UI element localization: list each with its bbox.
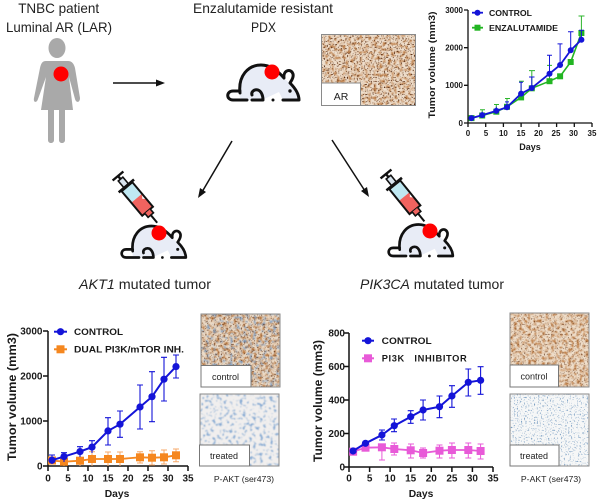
chart: dual PI3K/mTOR inhibitor tumor volume: 15 — [102, 474, 114, 484]
icon: treated mouse right — [389, 224, 453, 257]
chart: enzalutamide tumor volume: Days — [519, 142, 541, 152]
chart: enzalutamide tumor volume: 0 — [466, 129, 471, 138]
chart: dual PI3K/mTOR inhibitor tumor volume: Days — [105, 489, 130, 500]
chart: PI3K inhibitor tumor volume: Tumor volume (mm3) — [311, 340, 325, 462]
chart: dual PI3K/mTOR inhibitor tumor volume: 10 — [82, 474, 94, 484]
panel: PIK3CA control histology — [510, 313, 589, 387]
chart: enzalutamide tumor volume: 10 — [499, 129, 508, 138]
heading: patient: TNBC patient — [18, 0, 99, 16]
chart: dual PI3K/mTOR inhibitor tumor volume: DUAL PI3K/mTOR INH. — [74, 345, 184, 355]
chart: PI3K inhibitor tumor volume: 35 — [487, 474, 499, 484]
chart: PI3K inhibitor tumor volume: 15 — [405, 474, 417, 484]
panel: AKT1 treated histology — [200, 394, 279, 466]
chart: PI3K inhibitor tumor volume: 800 — [328, 328, 345, 340]
panel: AR histology: AR — [334, 91, 349, 103]
chart: enzalutamide tumor volume: 0 — [459, 119, 464, 128]
chart: PI3K inhibitor tumor volume: 600 — [328, 362, 345, 373]
chart: PI3K inhibitor tumor volume: 5 — [367, 474, 373, 484]
chart: dual PI3K/mTOR inhibitor tumor volume: 0 — [37, 462, 43, 472]
chart: enzalutamide tumor volume: 35 — [588, 129, 597, 138]
heading: patient — [6, 0, 112, 35]
chart: dual PI3K/mTOR inhibitor tumor volume: Tumor volume (mm3) — [5, 333, 19, 461]
chart: PI3K inhibitor tumor volume: 0 — [339, 462, 345, 474]
icon: patient figure with tumor — [34, 38, 80, 143]
chart: enzalutamide tumor volume — [427, 6, 597, 152]
heading: PDX — [193, 0, 333, 35]
chart: dual PI3K/mTOR inhibitor tumor volume: 2000 — [20, 372, 43, 382]
chart: enzalutamide tumor volume: CONTROL — [489, 9, 532, 18]
label: P-AKT right: P-AKT (ser473) — [521, 474, 581, 484]
chart: PI3K inhibitor tumor volume: CONTROL — [382, 336, 432, 346]
arrow: PDX to AKT1 — [198, 141, 232, 198]
chart: dual PI3K/mTOR inhibitor tumor volume: 30 — [162, 474, 174, 484]
chart: enzalutamide tumor volume: 3000 — [445, 6, 464, 15]
chart: dual PI3K/mTOR inhibitor tumor volume: 1000 — [20, 416, 43, 428]
panel: PIK3CA treated histology: treated — [520, 451, 548, 461]
heading: PDX: PDX — [251, 19, 277, 35]
panel: AKT1 treated histology: treated — [210, 451, 238, 461]
chart: enzalutamide tumor volume: 30 — [569, 129, 578, 138]
chart: dual PI3K/mTOR inhibitor tumor volume: 25 — [142, 474, 154, 484]
panel: AKT1 control histology: control — [212, 372, 239, 382]
panel: AR histology — [322, 34, 416, 106]
chart: PI3K inhibitor tumor volume: 30 — [467, 474, 478, 484]
icon: PDX mouse — [228, 64, 299, 102]
chart: dual PI3K/mTOR inhibitor tumor volume: 20 — [122, 474, 134, 484]
arrow: patient to PDX — [113, 80, 165, 86]
chart: dual PI3K/mTOR inhibitor tumor volume — [5, 326, 194, 500]
chart: PI3K inhibitor tumor volume: 25 — [446, 474, 458, 484]
chart: PI3K inhibitor tumor volume: 20 — [426, 474, 437, 484]
chart: PI3K inhibitor tumor volume: Days — [409, 489, 434, 500]
chart: PI3K inhibitor tumor volume: 0 — [346, 474, 352, 484]
chart: dual PI3K/mTOR inhibitor tumor volume: 3000 — [20, 326, 43, 338]
chart: enzalutamide tumor volume: ENZALUTAMIDE — [489, 24, 559, 33]
heading: PIK3CA mutated tumor: PIK3CA mutated tumor — [360, 276, 504, 292]
label: P-AKT left: P-AKT (ser473) — [214, 474, 274, 484]
icon: syringe right — [378, 168, 432, 228]
panel: PIK3CA treated histology — [510, 394, 589, 466]
chart: PI3K inhibitor tumor volume — [311, 328, 499, 500]
panel: PIK3CA control histology: control — [520, 372, 548, 382]
chart: PI3K inhibitor tumor volume: 10 — [385, 474, 396, 484]
chart: dual PI3K/mTOR inhibitor tumor volume: 5 — [65, 474, 71, 484]
chart: dual PI3K/mTOR inhibitor tumor volume: 35 — [182, 474, 194, 484]
chart: enzalutamide tumor volume: 25 — [552, 129, 561, 138]
chart: PI3K inhibitor tumor volume: 200 — [328, 429, 345, 440]
chart: enzalutamide tumor volume: 15 — [517, 129, 526, 138]
chart: enzalutamide tumor volume: 2000 — [445, 44, 464, 52]
chart: PI3K inhibitor tumor volume: 400 — [328, 396, 345, 406]
heading: patient: Luminal AR (LAR) — [6, 19, 112, 35]
icon: syringe left — [110, 170, 165, 229]
chart: enzalutamide tumor volume: 1000 — [445, 81, 464, 90]
chart: enzalutamide tumor volume: 5 — [484, 129, 489, 138]
chart: enzalutamide tumor volume: Tumor volume (mm3) — [427, 12, 438, 118]
chart: dual PI3K/mTOR inhibitor tumor volume: CONTROL — [74, 327, 123, 337]
panel: AKT1 control histology — [201, 314, 280, 387]
icon: treated mouse left — [122, 226, 186, 259]
arrow: PDX to PIK3CA — [332, 140, 369, 197]
chart: PI3K inhibitor tumor volume: PI3K INHIBITOR — [382, 354, 467, 364]
heading: AKT1 mutated tumor: AKT1 mutated tumor — [78, 276, 211, 292]
chart: dual PI3K/mTOR inhibitor tumor volume: 0 — [45, 474, 51, 484]
chart: enzalutamide tumor volume: 20 — [534, 129, 543, 138]
heading: PDX: Enzalutamide resistant — [193, 0, 333, 16]
